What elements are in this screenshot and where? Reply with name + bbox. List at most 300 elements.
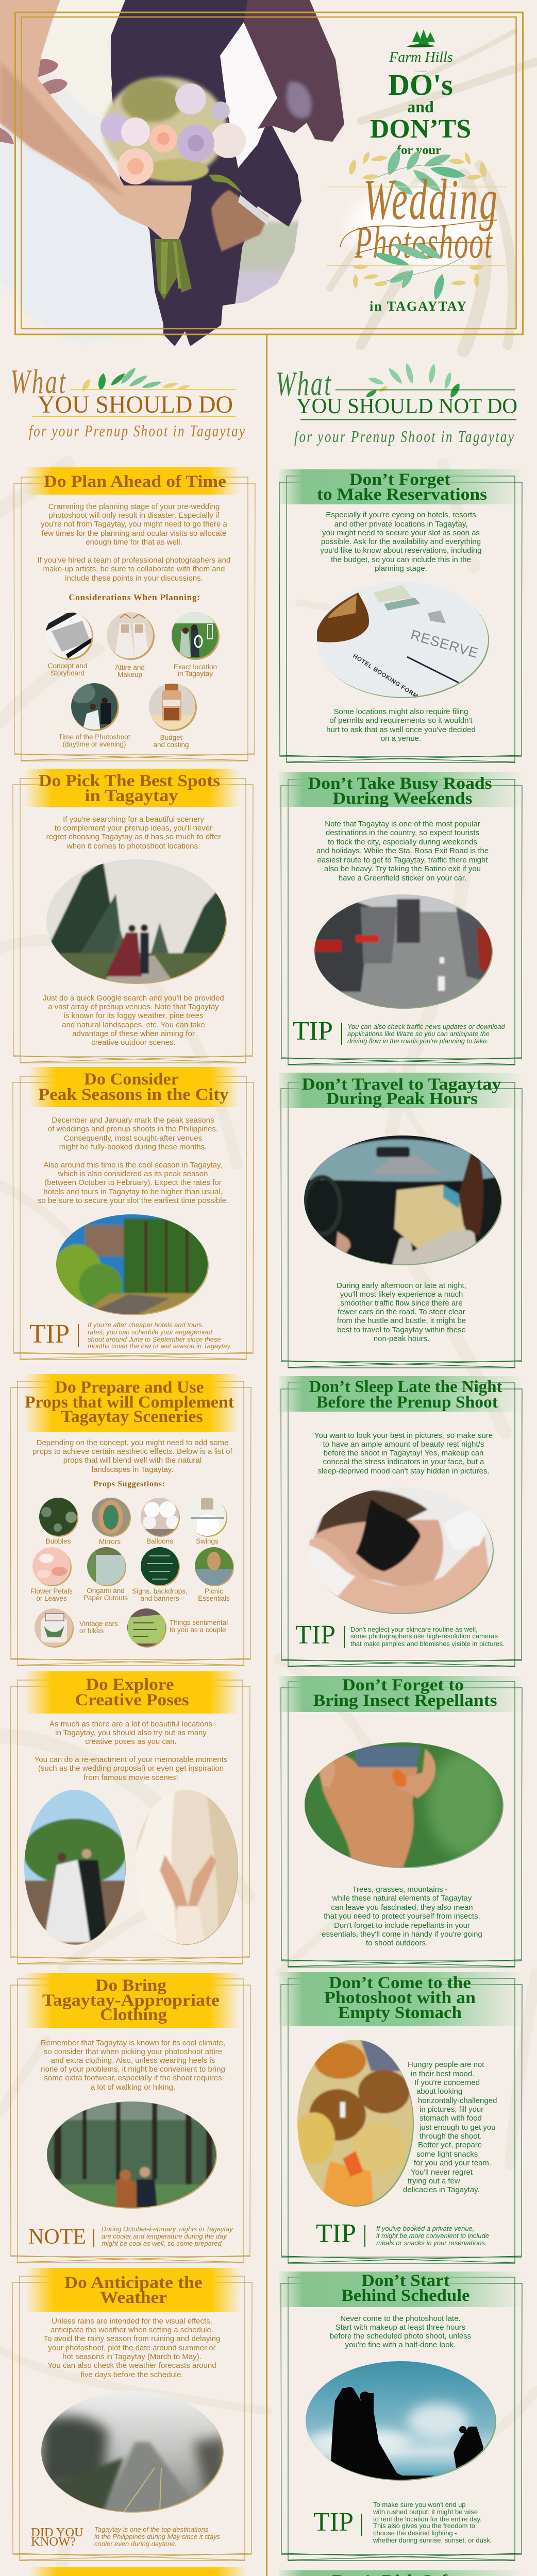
body text: hotels and tours in Tagaytay to be higher than usual,	[43, 1188, 223, 1196]
logo: Farm Hills	[389, 29, 453, 73]
body text: so consider that when picking your photoshoot attire	[44, 2047, 222, 2056]
body text: Remember that Tagaytay is known for its cool climate,	[41, 2039, 225, 2047]
icon: origami	[83, 1546, 128, 1602]
body text: hot seasons in Tagaytay (March to May).	[62, 2352, 202, 2361]
tip: meals or snacks in your reservations.	[376, 2239, 487, 2247]
panel: Don't Take Busy Roads	[279, 772, 522, 1065]
script: Wedding Photoshoot: Wedding	[363, 168, 497, 232]
heading: During Weekends	[333, 789, 473, 808]
body text	[322, 1885, 482, 1947]
body text: for you and your team.	[414, 2159, 491, 2167]
tip: TIP	[295, 1620, 335, 1650]
bouquet stems	[155, 239, 192, 300]
body text: the budget, so you can include this in the	[331, 555, 471, 564]
photo: couple in pine forest	[44, 2099, 219, 2210]
body text: props to achieve certain aesthetic effects. Below is a list of	[32, 1447, 233, 1456]
section heading: what you should not do	[276, 362, 517, 446]
body text: Hungry people are not	[408, 2060, 484, 2069]
body text: include these points in your discussions.	[65, 574, 203, 583]
icon: budget and costing	[147, 683, 198, 749]
body text: Start with makeup at least three hours	[335, 2323, 465, 2332]
panel: Don't Forget to Make Reservations	[279, 469, 522, 762]
body text: is known for its foggy weather, pine trees	[64, 1011, 203, 1020]
tip: TIP	[293, 1016, 333, 1046]
body text	[314, 1431, 493, 1476]
body text: on a venue.	[381, 734, 421, 743]
body text: December and January mark the peak seasons	[52, 1116, 214, 1125]
icon: balloons: Balloons	[146, 1537, 173, 1545]
body text: five days before the schedule.	[80, 2370, 183, 2379]
icon: sentimental things: Things sentimental	[170, 1619, 228, 1626]
tip: that make pimples and blemishes visible in pictures.	[350, 1640, 505, 1648]
icon: vintage cars: Vintage cars	[79, 1620, 118, 1628]
body text: you'll most likely experience a much	[340, 1290, 463, 1299]
body text: a lot of walking or hiking.	[91, 2083, 175, 2092]
body text: before the scheduled photo shoot, unless	[330, 2332, 471, 2341]
note: might be cool as well, so come prepared.	[102, 2240, 223, 2247]
panel: Do Bring Tagaytay-Appropriate Clothing	[10, 1973, 250, 2263]
photo: pine forest and hotel	[52, 1213, 211, 1316]
photo: spraying insect repellent on leg	[303, 1741, 507, 1870]
heading: Don’t Start	[362, 2272, 449, 2290]
body text: to complement your prenup ideas, you'll never	[55, 824, 212, 833]
bottom leaves	[353, 240, 483, 301]
photo: snacks	[294, 2038, 417, 2208]
body text: If you've hired a team of professional photographers and	[38, 556, 230, 565]
icon: time of the photoshoot	[58, 683, 130, 748]
body text: in Tagaytay, you should also try out as many	[55, 1728, 207, 1737]
note: NOTE	[28, 2225, 86, 2249]
body text: stomach with food	[419, 2114, 482, 2123]
icon: flower petals	[30, 1546, 73, 1602]
icon: budget and costing: Budget	[160, 734, 182, 741]
body text: You want to look your best in pictures, so make sure	[314, 1431, 493, 1440]
heading: Do Consider	[84, 1070, 179, 1089]
icon: flower petals: or Leaves	[36, 1595, 67, 1602]
photo: hotel booking form	[314, 580, 492, 701]
heading	[39, 772, 220, 805]
body text: Don't forget to include repellants in your	[334, 1921, 470, 1930]
body text	[330, 2314, 471, 2349]
body text	[43, 994, 224, 1047]
tip	[29, 1319, 232, 1350]
icon: signs and banners: and banners	[140, 1595, 179, 1602]
photo: traffic	[312, 891, 497, 1010]
panel: Don't Sleep Late	[279, 1376, 522, 1667]
heading: During Peak Hours	[326, 1090, 478, 1108]
body text: through the shoot.	[419, 2132, 482, 2141]
icon: vintage cars	[33, 1607, 118, 1649]
body text: and extra clothing. Also, unless wearing heels is	[51, 2056, 215, 2065]
icon: origami: Paper Cutouts	[83, 1594, 128, 1602]
did you know: KNOW?	[31, 2535, 76, 2549]
body text: Consequently, most sought-after venues	[64, 1134, 202, 1143]
heading	[317, 470, 487, 504]
heading: Don’t Travel to Tagaytay	[302, 1075, 501, 1094]
body text: creative poses as you can.	[85, 1737, 177, 1746]
heading	[64, 2274, 203, 2307]
body text: fewer cars on the road. To steer clear	[338, 1308, 465, 1316]
icon: attire and makeup: Makeup	[118, 671, 142, 679]
body text: You can do a re-enactment of your memorable moments	[35, 1755, 227, 1764]
body text: also be heavy. Try taking the Batino exit if you	[324, 865, 481, 873]
heading: Don’t Take Busy Roads	[308, 774, 492, 793]
body text: If you're searching for a beautiful scenery	[63, 815, 204, 824]
panel: Do Explore Creative Poses	[10, 1671, 250, 1964]
tip: TIP	[316, 2219, 356, 2248]
photo: foggy road	[39, 2388, 227, 2519]
body text: few times for the planning and ocular visits so allocate	[42, 529, 226, 538]
title: DO's and DON'Ts: DON’TS	[370, 114, 471, 144]
bouquet	[100, 77, 246, 193]
body text: have a Greenfield sticker on your car.	[339, 874, 466, 883]
body text: Some locations might also require filing	[334, 707, 468, 716]
heading: Before the Prenup Shoot	[316, 1393, 498, 1412]
photo: hotel booking form: RESERVE	[409, 627, 480, 661]
heading	[302, 1075, 501, 1108]
tip: Don't neglect your skincare routine as well,	[350, 1625, 478, 1633]
body text: while these natural elements of Tagaytay	[332, 1894, 472, 1903]
top leaves	[347, 147, 488, 198]
logo: Farm Hills: GARDEN	[415, 70, 427, 73]
photo: reading a map in a car	[301, 1133, 505, 1267]
body text: (between October to February). Expect the rates for	[44, 1178, 222, 1187]
heading: Do Pick The Best Spots	[39, 772, 220, 790]
body text: creative outdoor scenes.	[91, 1038, 176, 1047]
body text	[38, 502, 230, 583]
icon: origami: Origami and	[87, 1587, 125, 1595]
tip: shoot around June to September since these	[88, 1335, 221, 1343]
title: DO's and DON'Ts: and	[407, 97, 434, 116]
body text: props that will blend well with the natural	[63, 1456, 202, 1465]
icon: exact location: in Tagaytay	[178, 670, 213, 677]
did you know: cooler even during daytime.	[94, 2540, 177, 2548]
tip: choose the desired lighting -	[373, 2529, 457, 2537]
body text: to flock the city, especially during weekends	[328, 838, 477, 846]
heading: Props that will Complement	[25, 1393, 234, 1412]
groom hand and cuff	[211, 190, 268, 251]
dress	[111, 0, 163, 336]
did you know	[31, 2526, 221, 2549]
note: During October-February, nights in Tagaytay	[102, 2225, 233, 2233]
photo: hotel booking form: HOTEL BOOKING FORM	[351, 653, 419, 700]
body text: enough time for that as well.	[86, 538, 182, 547]
body text: If you're concerned	[414, 2078, 480, 2087]
tip: some photographers use high-resolution cameras	[350, 1632, 498, 1640]
icon: picnic essentials: Essentials	[198, 1595, 230, 1602]
body text: hurt to ask that as well once you've decided	[326, 725, 476, 734]
photo: couple among pine trees	[44, 858, 229, 987]
body text: make-up artists, be sure to collaborate with them and	[43, 565, 225, 573]
note	[28, 2225, 233, 2249]
body text: conceal the stress indicators in your face, but a	[323, 1458, 484, 1466]
section heading: what you should not do: What	[276, 365, 332, 403]
heading	[42, 1976, 220, 2024]
panel: Don't Risk Safety for Creativity	[279, 2570, 522, 2576]
body text: you're fine with a half-done look.	[345, 2341, 456, 2349]
leaf spray	[365, 362, 462, 399]
body text: from the hustle and bustle, it might be	[337, 1316, 466, 1325]
panel: Don't Come with an Empty Stomach	[279, 1972, 522, 2263]
heading: Tagaytay-Appropriate	[42, 1991, 220, 2010]
icon: bubbles	[39, 1498, 78, 1544]
icon: picnic essentials	[193, 1546, 234, 1602]
panel: Don't Forget Insect Repellants	[279, 1676, 522, 1967]
heading: Weather	[100, 2289, 167, 2307]
icon: concept and storyboard: Concept and	[48, 662, 87, 670]
body text: Depending on the concept, you might need to add some	[37, 1438, 228, 1447]
body text: Unless rains are intended for the visual effects,	[52, 2317, 212, 2326]
tip: driving flow in the roads you're planning to take.	[347, 1037, 489, 1045]
center divider	[266, 335, 267, 2576]
tip: This also gives you the freedom to	[373, 2522, 475, 2530]
heading: Bring Insect Repellants	[313, 1691, 497, 1710]
icon: balloons	[141, 1498, 180, 1544]
body text: of weddings and prenup shoots in the Philippines.	[48, 1125, 218, 1133]
tip: If you're after cheaper hotels and tours	[88, 1321, 203, 1329]
body text: horizontally-challenged	[418, 2096, 497, 2105]
body text: can leave you fascinated, they also mean	[331, 1903, 473, 1912]
body text: so be sure to secure your slot the earliest time possible.	[38, 1196, 228, 1205]
icon: flower petals: Flower Petals	[30, 1587, 73, 1595]
heading: Do Bring	[95, 1976, 167, 1995]
heading: Don’t Sleep Late the Night	[309, 1378, 502, 1396]
body text: best to travel to Tagaytay within these	[337, 1326, 466, 1334]
script: Wedding Photoshoot	[340, 168, 497, 267]
section heading: what you should not do: YOU SHOULD NOT DO	[296, 395, 517, 418]
title: DO's and DON'Ts: DO's	[388, 68, 453, 101]
icon: time of the photoshoot: (daytime or evening)	[62, 740, 126, 748]
panel: Do Prepare and Use Props	[10, 1374, 251, 1666]
note: are cooler and temperature during the day	[102, 2232, 227, 2240]
body text: before the shoot in Tagaytay! Yes, makeup can	[324, 1449, 483, 1458]
body text	[41, 2039, 225, 2092]
glow behind script	[338, 178, 508, 276]
heading: Do Explore	[86, 1675, 174, 1694]
in Tagaytay: in TAGAYTAY	[370, 299, 467, 314]
heading: Photoshoot with an	[324, 1989, 476, 2007]
leaf spray	[80, 366, 190, 393]
section heading: what you should do	[10, 363, 245, 440]
heading: Do Anticipate the	[64, 2274, 203, 2292]
body text	[35, 1720, 227, 1782]
heading: Behind Schedule	[341, 2286, 470, 2305]
icon: exact location	[170, 611, 220, 677]
icon: picnic essentials: Picnic	[205, 1587, 223, 1595]
body text	[403, 2060, 497, 2194]
body text: trying out a few	[408, 2177, 460, 2185]
heading	[309, 1378, 502, 1412]
section heading: what you should do: YOU SHOULD DO	[38, 392, 233, 418]
hero title block	[327, 29, 508, 314]
heading: in Tagaytay	[85, 787, 178, 805]
body text: planning stage.	[375, 564, 427, 573]
body text: regret choosing Tagaytay as it has so much to offer	[46, 833, 221, 841]
icon: sentimental things: to you as a couple	[170, 1626, 226, 1634]
heading	[75, 1675, 189, 1709]
body text: Note that Tagaytay is one of the most popular	[325, 820, 480, 828]
body text: smoother traffic flow since there are	[340, 1299, 463, 1308]
body text: (such as the wedding proposal) or even get inspiration	[38, 1764, 224, 1773]
body text: Also around this time is the cool season in Tagaytay,	[43, 1161, 223, 1170]
heading	[341, 2272, 470, 2305]
heading: Do Prepare and Use	[55, 1378, 204, 1397]
tip: To make sure you won't end up	[373, 2501, 466, 2509]
did you know: Tagaytay is one of the top destinations	[94, 2526, 209, 2533]
heading: Peak Seasons in the City	[38, 1086, 229, 1104]
icon: concept and storyboard	[45, 612, 93, 677]
body text: easiest route to get to Tagaytay, traffic there might	[317, 856, 488, 865]
body text: in pictures, fill your	[419, 2105, 483, 2114]
heading: to Make Reservations	[317, 485, 487, 504]
icon: attire and makeup	[106, 611, 155, 679]
body text: non-peak hours.	[374, 1334, 429, 1343]
suit	[111, 0, 344, 350]
tip	[293, 1016, 505, 1046]
tip: applications like Waze so you can anticipate the	[347, 1030, 490, 1038]
body text	[316, 820, 489, 883]
heading: Creative Poses	[75, 1691, 189, 1709]
body text	[44, 2317, 220, 2379]
tip: it might be more convenient to include	[376, 2232, 489, 2240]
body text: Never come to the photoshoot late.	[340, 2314, 461, 2323]
body text: You can also check the weather forecasts around	[47, 2361, 216, 2370]
heading: Clothing	[100, 2006, 167, 2024]
icon: bubbles: Bubbles	[46, 1537, 71, 1545]
body text: that you need to protect yourself from insects.	[324, 1912, 480, 1921]
body text: Trees, grasses, mountains -	[352, 1885, 448, 1894]
hero frame	[15, 12, 523, 334]
heading: Do Plan Ahead of Time	[44, 472, 226, 491]
body text: none of your problems, it might be convenient to bring	[41, 2065, 225, 2074]
subheading: Props Suggestions:	[93, 1480, 165, 1488]
body text: some extra footwear, especially if the shoot requires	[44, 2074, 222, 2082]
tip: rates, you can schedule your engagement	[88, 1328, 213, 1336]
tip: months cover the low or wet season in Tagaytay.	[88, 1342, 232, 1350]
body text: and natural landscapes, etc. You can take	[62, 1021, 205, 1029]
heading: Don’t Come to the	[329, 1974, 471, 1992]
body text	[337, 1281, 466, 1343]
icon: concept and storyboard: Storyboard	[51, 669, 85, 677]
body text: from famous movie scenes!	[83, 1773, 178, 1782]
body text: when it comes to photoshoot locations.	[66, 842, 200, 851]
body text: and other private locations in Tagaytay,	[334, 520, 467, 529]
panel: Do Enjoy Every Moment	[13, 2567, 254, 2576]
panel: Do Anticipate the Weather	[12, 2268, 252, 2561]
body text	[320, 511, 482, 573]
section heading: what you should not do: for your Prenup Shoot in Tagaytay	[294, 428, 514, 446]
body text: advantage of these when aiming for	[72, 1029, 195, 1038]
panel: Don't Start Behind Schedule	[279, 2272, 522, 2561]
body text: just enough to get you	[419, 2123, 496, 2132]
body text: During early afternoon or late at night,	[337, 1281, 466, 1290]
icon: exact location: Exact location	[174, 663, 217, 671]
body text	[38, 1116, 228, 1205]
body text: essentials, they'll come in handy if you're going	[322, 1930, 482, 1939]
heading: Empty Stomach	[338, 2004, 462, 2022]
icon: signs and banners: Signs, backdrops,	[132, 1587, 188, 1595]
body text: photoshoot will only result in disaster. Especially if	[48, 511, 220, 520]
body text: Just do a quick Google search and you'll be provided	[43, 994, 224, 1003]
heading	[25, 1378, 234, 1426]
icon: time of the photoshoot: Time of the Photoshoot	[58, 733, 130, 741]
body text: some light snacks	[416, 2150, 478, 2159]
white gap	[220, 22, 277, 168]
tip: whether during sunrise, sunset, or dusk.	[373, 2536, 492, 2544]
photo: heart hands	[131, 1788, 242, 1947]
heading: Don’t Forget	[349, 470, 450, 489]
body text: about looking	[416, 2087, 462, 2096]
panel: Do Pick The Best Spots	[13, 769, 253, 1063]
heading	[313, 1676, 497, 1710]
icon: mirrors	[90, 1497, 131, 1546]
body text: you'd like to know about reservations, including	[320, 546, 482, 555]
logo: Farm Hills: Farm Hills	[389, 49, 453, 65]
icon: attire and makeup: Attire and	[115, 664, 145, 671]
body text: delicacies in Tagaytay.	[403, 2185, 480, 2194]
icon: mirrors: Mirrors	[99, 1538, 121, 1546]
photo: woman sleeping with eye mask	[307, 1486, 495, 1615]
heading: Don’t Forget to	[342, 1676, 464, 1694]
body text: you might need to secure your slot as soon as	[322, 529, 480, 537]
heading: Tagaytay Sceneries	[61, 1408, 203, 1426]
sleeve	[244, 0, 344, 142]
tip: TIP	[313, 2507, 354, 2537]
did you know: DID YOU	[31, 2526, 83, 2539]
section heading: what you should do: What	[10, 363, 66, 401]
panel: Do Plan Ahead of Time	[14, 467, 255, 761]
hero photo: bride and groom with bouquet	[0, 0, 350, 350]
body text	[46, 815, 221, 851]
tip: with rushed output, it might be wise	[373, 2508, 478, 2516]
icon: signs and banners	[132, 1546, 188, 1602]
body text: your photoshoot, plot the date around summer or	[48, 2344, 216, 2352]
heading	[324, 1974, 476, 2022]
body text: in their best mood.	[411, 2070, 474, 2078]
title: DO's and DON'Ts: for your	[397, 143, 441, 157]
did you know: in the Philippines during May since it stays	[94, 2533, 221, 2540]
background behind groom	[277, 134, 288, 155]
body text: you're not from Tagaytay, you might need to go there a	[41, 520, 227, 529]
heading	[308, 774, 492, 808]
tip: If you've booked a private venue,	[376, 2225, 474, 2232]
body text: landscapes in Tagaytay.	[92, 1465, 173, 1474]
tip	[316, 2219, 489, 2248]
body text: Especially if you're eyeing on hotels, resorts	[326, 511, 476, 519]
photo: bride and groom outdoors	[21, 1788, 129, 1947]
title: DO's and DON'Ts	[370, 68, 471, 157]
body text: Better yet, prepare	[418, 2141, 482, 2149]
body text: possible. Ask for the availability and everything	[321, 537, 481, 546]
icon: budget and costing: and costing	[153, 741, 189, 749]
tip	[313, 2501, 492, 2544]
heading	[38, 1070, 229, 1104]
tip: TIP	[29, 1319, 70, 1349]
tip	[295, 1620, 505, 1650]
icon: sentimental things	[126, 1607, 228, 1649]
panel: Don't Travel During Peak Hours	[279, 1073, 522, 1368]
body text: a vast array of prenup venues. Note that Tagaytay	[48, 1003, 219, 1011]
body text: and holidays. While the Sta. Rosa Exit Road is the	[316, 846, 489, 855]
body text: Cramming the planning stage of your pre-wedding	[48, 502, 220, 511]
icon: swings: Swings	[196, 1537, 219, 1545]
body text: to shoot outdoors.	[366, 1939, 428, 1947]
panel: Do Consider Peak Seasons	[13, 1067, 254, 1360]
bride arm	[0, 0, 192, 249]
section heading: what you should do: for your Prenup Shoot in Tagaytay	[29, 422, 245, 440]
body text: might be fully-booked during these months.	[59, 1143, 207, 1151]
photo: couple silhouette and photographer	[304, 2360, 497, 2486]
